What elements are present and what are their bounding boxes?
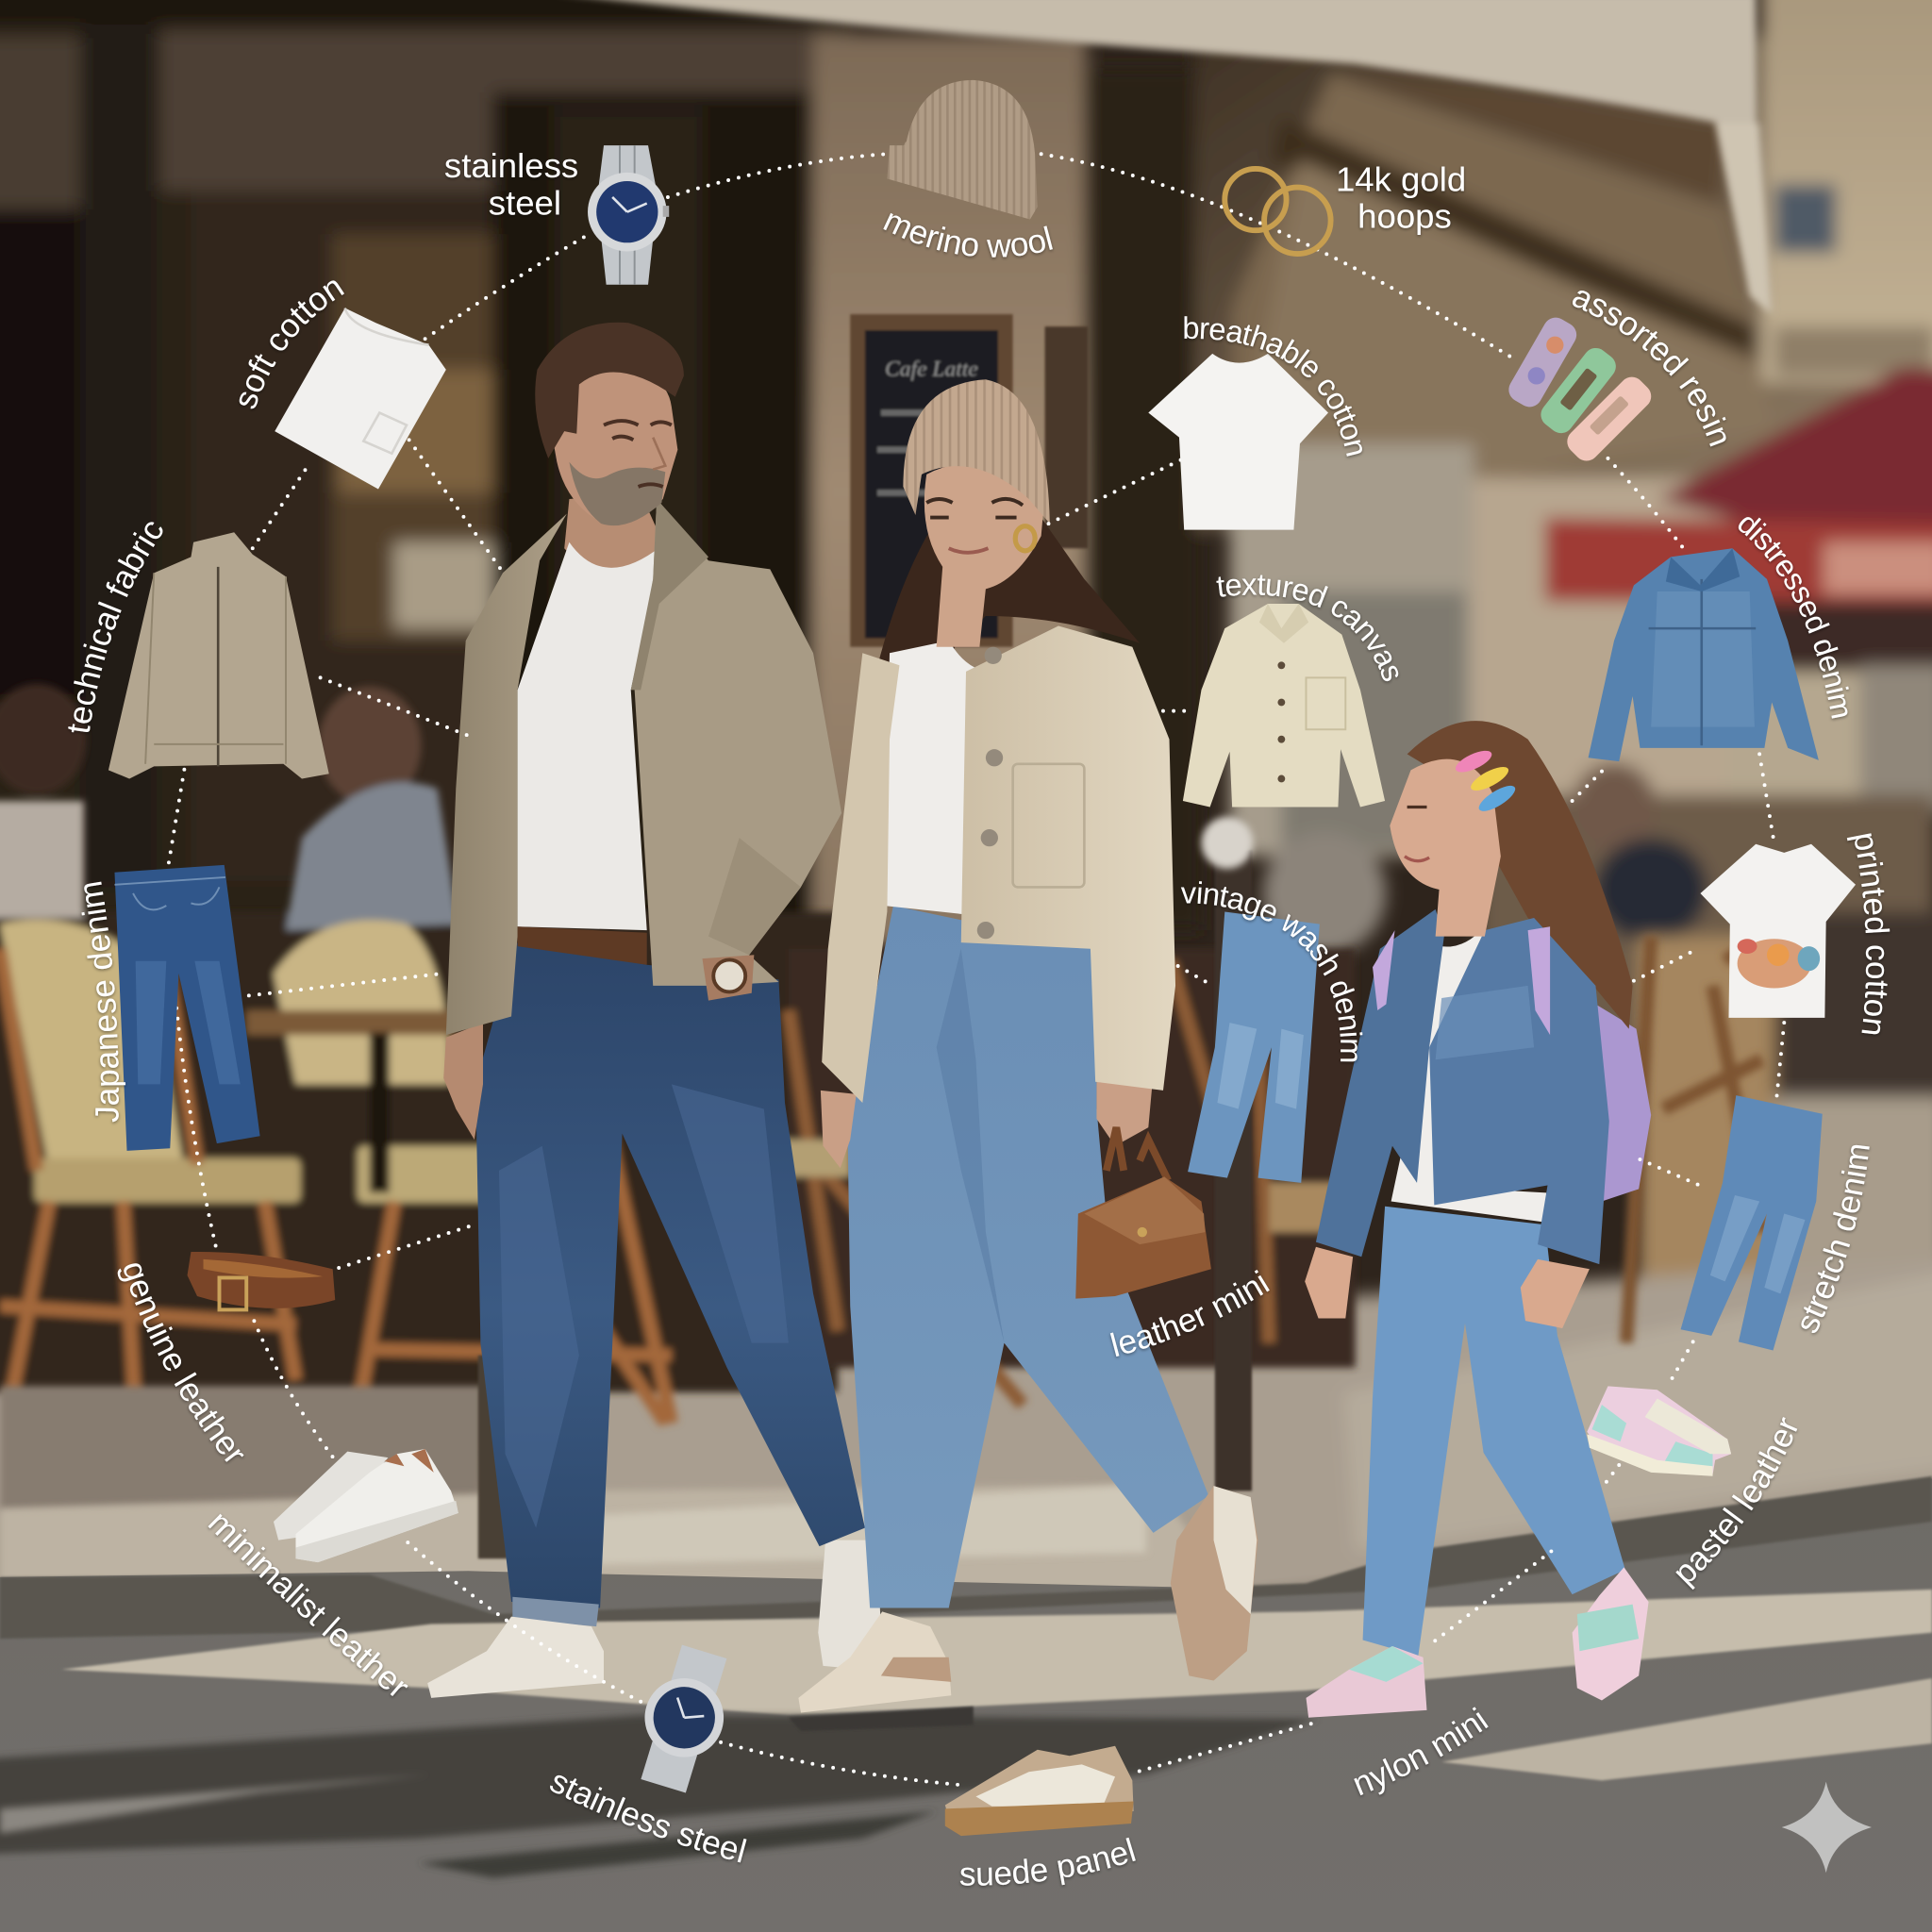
item: printed cotton tee: [1700, 844, 1856, 1018]
item: leather belt: [188, 1252, 335, 1309]
man neck: [564, 492, 665, 591]
dotted connector network: [169, 154, 1784, 1786]
man face: [546, 363, 677, 525]
woman facial features: [926, 499, 1023, 553]
chalkboard: [850, 314, 1088, 647]
woman beanie: [903, 379, 1050, 524]
sidewalk and road: [0, 1386, 1932, 1932]
label: textured canvas: textured canvas: [1216, 575, 1400, 684]
man walking: [427, 323, 881, 1698]
item: pastel leather sneakers: [1587, 1386, 1731, 1476]
girl denim jacket right: [1429, 918, 1609, 1264]
label: nylon mini: nylon mini: [1353, 1707, 1489, 1797]
item: technical fabric jacket: [108, 532, 329, 778]
man beard: [569, 462, 665, 525]
man hair: [535, 323, 684, 458]
label: genuine leather: genuine leather: [117, 1263, 244, 1464]
woman hands: [821, 1082, 1152, 1168]
girl hands: [1305, 1247, 1590, 1328]
item: folded soft cotton tee: [275, 308, 446, 490]
item: white minimalist sneakers: [274, 1449, 458, 1562]
item: steel watch top: [588, 145, 669, 285]
item: breathable cotton tee: [1148, 354, 1328, 530]
girl walking: [1305, 721, 1651, 1718]
girl t-shirt: [1391, 926, 1546, 1223]
man t-shirt: [518, 542, 661, 930]
label: suede panel: suede panel: [959, 1838, 1136, 1889]
woman t-shirt: [883, 641, 991, 914]
woman jacket buttons: [977, 647, 1003, 939]
icon: sparkle watermark: [1782, 1782, 1872, 1873]
man belt: [518, 926, 647, 965]
item: steel watch bottom: [625, 1641, 742, 1797]
man jacket right: [635, 499, 841, 986]
label: assorted resin: assorted resin: [1572, 291, 1727, 449]
woman hair back: [862, 518, 1140, 740]
label: pastel leather: pastel leather: [1675, 1417, 1798, 1591]
woman earring: [1015, 526, 1035, 551]
item: suede panel sneaker: [945, 1746, 1134, 1836]
girl backpack straps: [1373, 926, 1550, 1035]
label: stainless steel bottom: stainless steel: [544, 1762, 750, 1871]
label: leather mini: leather mini: [1109, 1270, 1270, 1358]
woman neck and face: [924, 464, 1045, 647]
street bollards: [478, 817, 1253, 1558]
man facial features: [604, 421, 672, 487]
terrace seating blurred: [0, 684, 1762, 1424]
man back shoe: [818, 1541, 881, 1670]
woman back shoe: [1171, 1486, 1258, 1681]
chalkboard: Cafe Latte: [885, 357, 978, 381]
woman jacket left: [822, 653, 899, 1103]
label: distressed denim: distressed denim: [1737, 517, 1850, 721]
girl hair: [1407, 721, 1633, 1029]
woman jeans: [848, 906, 1208, 1607]
woman front shoe: [798, 1611, 951, 1713]
label: stainless steel top: steel: [489, 183, 561, 222]
label: soft cotton: soft cotton: [240, 280, 344, 409]
cream awning: [555, 0, 1772, 314]
girl denim jacket left: [1316, 909, 1444, 1257]
label: Japanese denim: Japanese denim: [80, 881, 126, 1124]
label: breathable cotton: breathable cotton: [1184, 316, 1364, 458]
label: technical fabric: technical fabric: [68, 522, 162, 734]
girl backpack: [1595, 1004, 1651, 1201]
item: vintage wash jeans: [1188, 912, 1320, 1183]
girl neck and face: [1390, 759, 1501, 937]
item: merino beanie: [887, 80, 1038, 219]
item: distressed denim jacket: [1589, 548, 1819, 761]
girl jeans: [1363, 1207, 1625, 1656]
man hand: [443, 1023, 483, 1140]
label: 14k gold hoops: 14k gold: [1336, 159, 1466, 198]
label: printed cotton: printed cotton: [1846, 833, 1890, 1036]
man front shoe: [427, 1617, 604, 1698]
label: 14k gold hoops: hoops: [1357, 197, 1452, 236]
man jacket left: [446, 514, 567, 1035]
man wrist and watch: [702, 955, 754, 1001]
girl facial features: [1405, 808, 1429, 861]
item: resin hair clips: [1505, 313, 1657, 466]
man jeans: [475, 942, 865, 1607]
item: gold hoops: [1224, 169, 1331, 254]
label: stainless steel top: stainless: [444, 146, 578, 185]
item: Japanese denim jeans: [114, 865, 260, 1151]
woman jacket right: [961, 626, 1175, 1091]
item: textured canvas overshirt: [1183, 604, 1385, 808]
label: stretch denim: stretch denim: [1800, 1145, 1871, 1336]
man jean cuff: [512, 1597, 599, 1626]
woman jacket pocket: [1013, 764, 1084, 887]
item: leather mini bag: [1075, 1127, 1211, 1299]
woman walking: [798, 379, 1258, 1713]
label: minimalist leather: minimalist leather: [201, 1504, 416, 1706]
girl hair clips: [1453, 746, 1519, 816]
label: vintage wash denim: vintage wash denim: [1181, 881, 1364, 1064]
item: stretch denim jeans: [1681, 1095, 1823, 1351]
label: merino wool: merino wool: [883, 213, 1054, 260]
girl shoes: [1306, 1567, 1649, 1718]
